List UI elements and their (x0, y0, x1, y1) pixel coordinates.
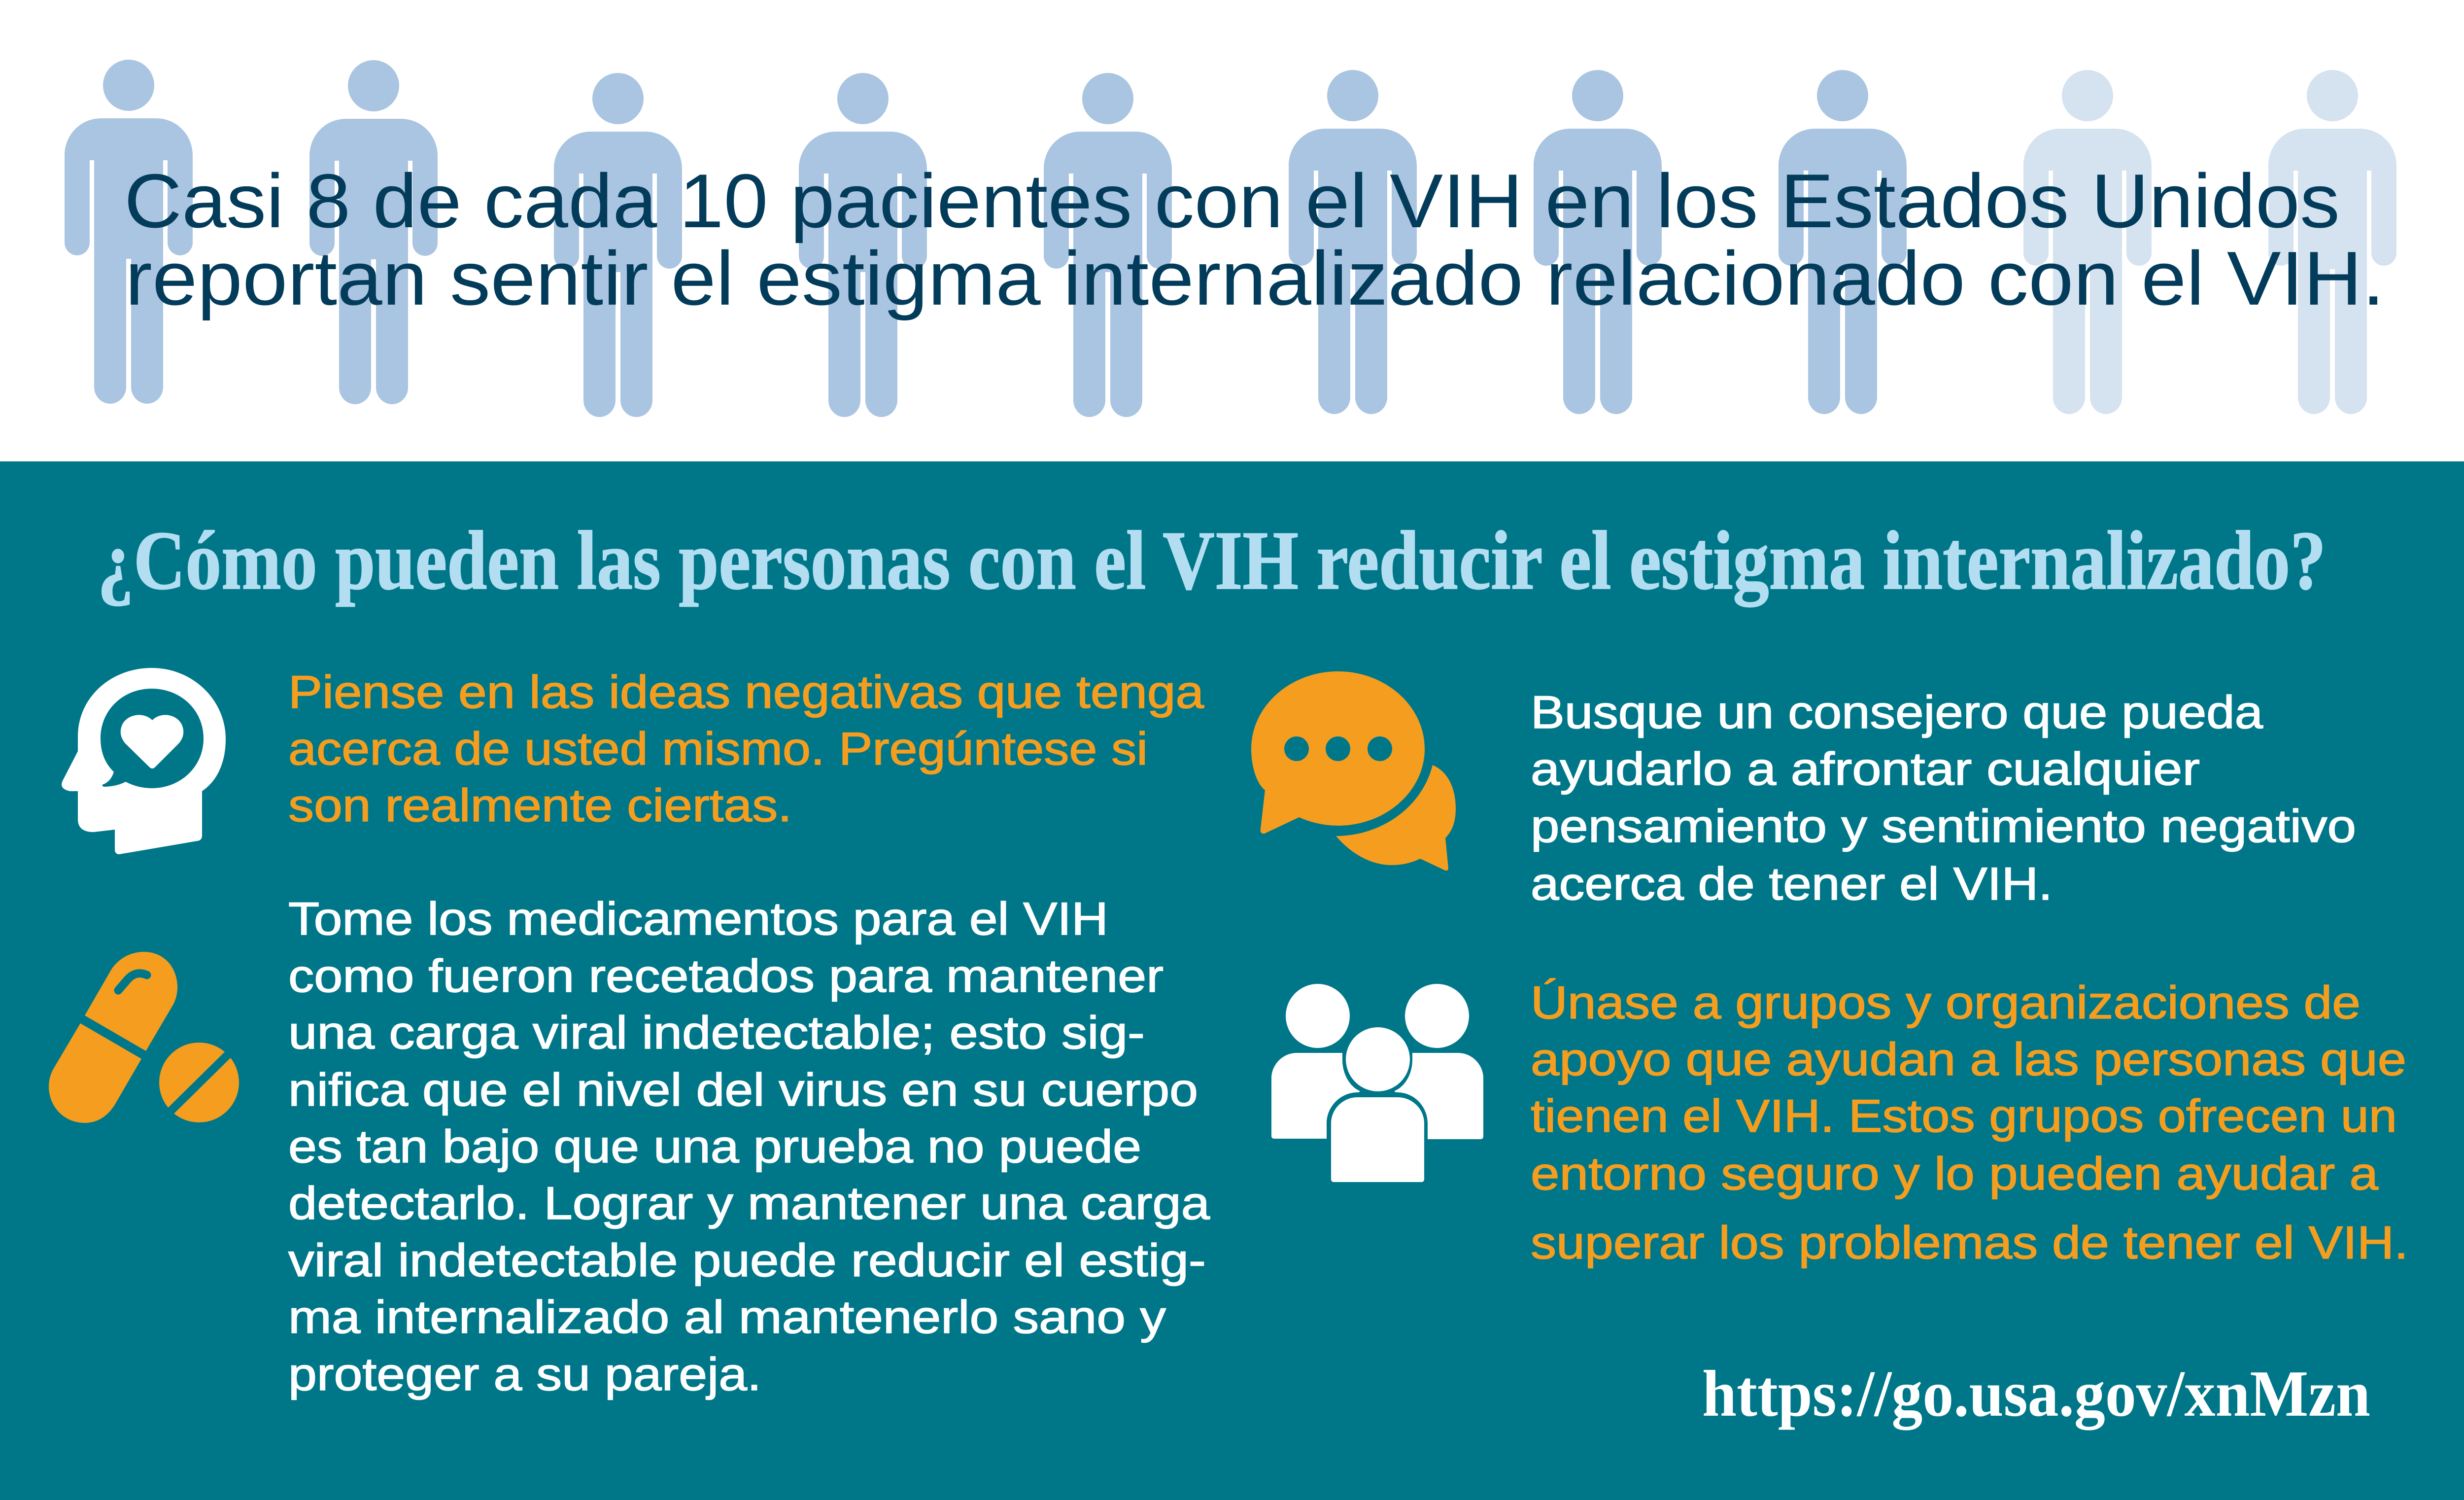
block: medication: una carga viral indetectable; esto sig- (288, 1007, 1145, 1058)
block: counselor: pensamiento y sentimiento negativo (1531, 800, 2356, 852)
white top background (0, 0, 2464, 461)
person 5 (1044, 73, 1172, 417)
block: support groups: apoyo que ayudan a las personas que (1531, 1033, 2406, 1085)
block: medication: es tan bajo que una prueba no puede (288, 1120, 1141, 1172)
block: medication: nifica que el nivel del virus en su cuerpo (288, 1064, 1198, 1116)
block: medication: Tome los medicamentos para el VIH (288, 893, 1108, 944)
block: medication: ma internalizado al mantenerlo sano y (288, 1291, 1166, 1343)
person 10 (light) (2268, 70, 2396, 414)
source URL: https://go.usa.gov/xnMzn (1702, 1357, 2370, 1430)
teal lower panel (0, 461, 2464, 1500)
block: medication (288, 893, 1210, 1400)
block: negative ideas: Piense en las ideas negativas que tenga (288, 666, 1204, 718)
block: support groups: tienen el VIH. Estos grupos ofrecen un (1531, 1090, 2397, 1142)
title statistic (124, 158, 2385, 321)
block: negative ideas: acerca de usted mismo. Pregúntese si (288, 723, 1148, 774)
block: support groups (1531, 977, 2408, 1268)
block: counselor: acerca de tener el VIH. (1531, 858, 2053, 909)
block: medication: proteger a su pareja. (288, 1348, 761, 1400)
icon: pills (49, 952, 239, 1123)
block: medication: detectarlo. Lograr y mantener una carga (288, 1177, 1210, 1229)
pictogram: 8 of 10 patients (65, 60, 2396, 417)
block: support groups: Únase a grupos y organizaciones de (1531, 977, 2361, 1028)
block: support groups: superar los problemas de tener el VIH. (1531, 1217, 2408, 1268)
title statistic: Casi 8 de cada 10 pacientes con el VIH en los Estados Unidos (124, 158, 2340, 244)
block: negative ideas (288, 666, 1204, 831)
person 1 (65, 60, 193, 404)
block: medication: como fueron recetados para mantener (288, 950, 1164, 1002)
person 9 (light) (2023, 70, 2152, 414)
person 4 (799, 73, 927, 417)
block: negative ideas: son realmente ciertas. (288, 779, 792, 831)
icon: support group (1271, 984, 1483, 1182)
person 8 (1779, 70, 1907, 414)
title statistic: reportan sentir el estigma internalizado relacionado con el VIH. (125, 236, 2385, 321)
block: counselor: Busque un consejero que pueda (1531, 686, 2263, 738)
person 2 (309, 60, 438, 404)
block: medication: viral indetectable puede reducir el estig- (288, 1234, 1206, 1286)
block: counselor (1531, 686, 2356, 909)
person 7 (1534, 70, 1662, 414)
icon: head with heart thought (62, 668, 226, 854)
block: counselor: ayudarlo a afrontar cualquier (1531, 743, 2200, 795)
block: support groups: entorno seguro y lo pueden ayudar a (1531, 1148, 2379, 1199)
person 6 (1289, 70, 1417, 414)
heart (121, 715, 183, 768)
icon: speech bubbles (1251, 671, 1456, 871)
person 3 (554, 73, 682, 417)
